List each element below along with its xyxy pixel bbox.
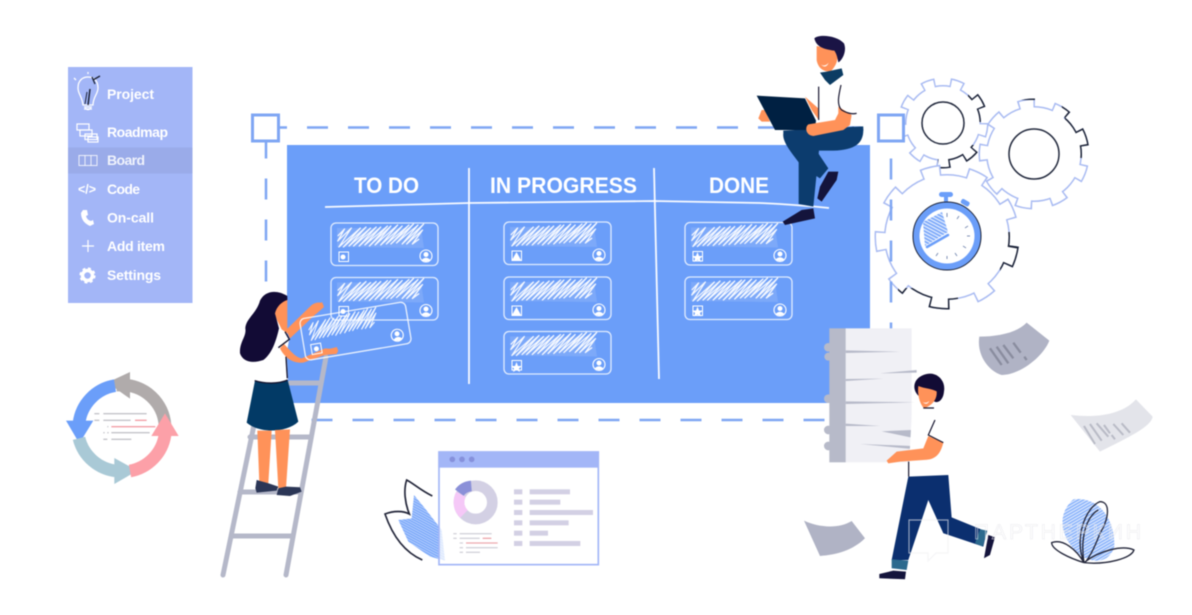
shirt bbox=[818, 77, 852, 122]
leaf scribble bbox=[385, 480, 445, 561]
menu labels: Board bbox=[107, 152, 145, 168]
icon: lightbulb bbox=[74, 72, 100, 110]
menu labels: Code bbox=[107, 181, 140, 197]
smile bbox=[923, 401, 929, 404]
dashed frame bbox=[252, 115, 904, 420]
icon: phone bbox=[81, 210, 94, 226]
near arm bbox=[280, 344, 338, 363]
shoe: front bbox=[783, 208, 815, 225]
woman on ladder bbox=[240, 292, 338, 496]
skirt bbox=[247, 380, 298, 431]
hair bbox=[814, 36, 845, 62]
shirt bbox=[908, 415, 948, 477]
far arm bbox=[286, 302, 323, 338]
legend lines bbox=[453, 534, 498, 552]
gear: right bbox=[978, 98, 1090, 210]
paper: flying light bbox=[1071, 399, 1153, 452]
arm bbox=[806, 107, 852, 136]
shoe: back bbox=[817, 172, 838, 202]
cards: to do bbox=[331, 223, 438, 320]
ladder bbox=[223, 357, 326, 575]
corner handle: top left bbox=[252, 115, 278, 141]
paper stack bbox=[824, 328, 917, 462]
pants bbox=[892, 475, 987, 560]
hair bbox=[240, 292, 287, 362]
cards: done bbox=[685, 222, 792, 320]
cuffs bbox=[892, 529, 987, 570]
menu labels: Project bbox=[107, 86, 154, 102]
legs bbox=[257, 429, 290, 488]
heading: done: DONE bbox=[709, 173, 769, 198]
arc: gray bbox=[107, 372, 165, 425]
column dividers bbox=[325, 168, 829, 384]
collar bbox=[820, 68, 843, 85]
icon: settings bbox=[80, 268, 95, 283]
face bbox=[275, 298, 287, 333]
sleeve lines bbox=[255, 332, 289, 383]
window header bbox=[438, 451, 599, 468]
dashboard window bbox=[385, 451, 599, 565]
menu labels bbox=[107, 86, 168, 283]
hand behind laptop bbox=[758, 97, 818, 122]
smile bbox=[821, 63, 829, 66]
cards: in progress bbox=[504, 222, 611, 374]
menu labels: Add item bbox=[107, 238, 165, 254]
face bbox=[817, 46, 838, 71]
shirt lines bbox=[819, 85, 857, 120]
icon: code: </> bbox=[78, 182, 96, 196]
arm bbox=[887, 436, 943, 463]
highlighted row: board bbox=[68, 148, 192, 174]
icon: roadmap bbox=[77, 124, 98, 142]
icon: board columns bbox=[79, 156, 97, 166]
sidebar menu bbox=[68, 67, 192, 303]
heading: to do: TO DO bbox=[354, 173, 419, 198]
front leg bbox=[799, 127, 863, 207]
gear: large with stopwatch bbox=[871, 161, 1023, 313]
woman's hand on card bbox=[312, 302, 338, 354]
watermark bbox=[909, 520, 1141, 561]
shirt bbox=[254, 328, 289, 383]
arc: blue bbox=[66, 386, 115, 443]
back leg bbox=[783, 132, 828, 178]
shirt lines bbox=[909, 408, 943, 477]
center text lines bbox=[94, 414, 155, 439]
donut chart bbox=[459, 486, 492, 519]
man sitting with laptop bbox=[757, 36, 863, 225]
paper: floor bbox=[804, 521, 865, 556]
icon: plus bbox=[82, 240, 94, 252]
menu labels: Settings bbox=[107, 267, 161, 283]
shoes bbox=[879, 535, 995, 579]
menu labels: On-call bbox=[107, 210, 154, 226]
plant: bottom right bbox=[1052, 499, 1134, 563]
gear: top bbox=[902, 82, 984, 164]
cycle diagram bbox=[66, 372, 179, 484]
paper: flying dark bbox=[979, 323, 1049, 375]
arc: pink bbox=[130, 413, 179, 471]
heading: in progress: IN PROGRESS bbox=[490, 173, 637, 198]
arc: light blue bbox=[79, 438, 137, 484]
panel: kanban board bbox=[287, 145, 870, 403]
icon: stopwatch bbox=[913, 192, 981, 270]
window body bbox=[439, 452, 598, 565]
man carrying paper stack bbox=[824, 328, 995, 579]
laptop bbox=[757, 96, 816, 130]
face bbox=[918, 386, 937, 408]
horizontal bars bbox=[514, 489, 593, 546]
watermark: ПАРТНЕРКИН bbox=[974, 521, 1141, 544]
hair bbox=[914, 374, 944, 402]
corner handle: top right bbox=[878, 115, 904, 141]
shoes bbox=[255, 480, 302, 496]
moving card bbox=[299, 302, 412, 361]
menu labels: Roadmap bbox=[107, 124, 168, 140]
